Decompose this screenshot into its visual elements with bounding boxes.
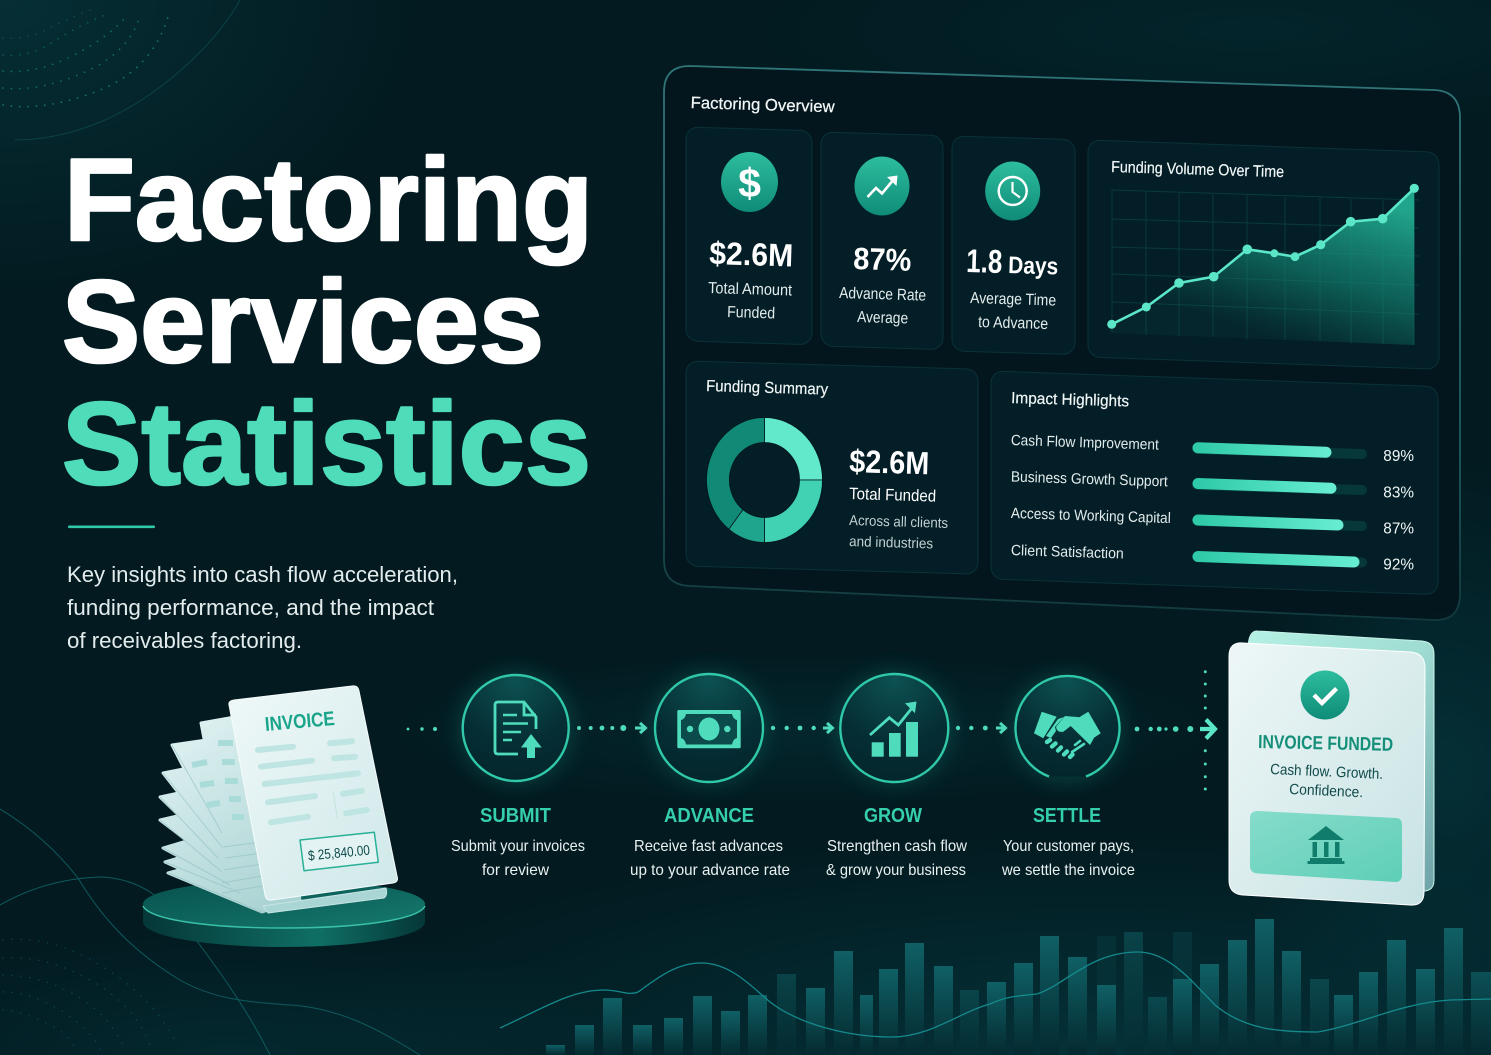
invoice amount box: $ 25,840.00 bbox=[307, 842, 371, 863]
donut chart bbox=[707, 418, 822, 542]
step: settle bbox=[1001, 672, 1135, 879]
subtitle: Key insights into cash flow acceleration, bbox=[67, 562, 458, 587]
progress row: business growth: 83% bbox=[1383, 484, 1414, 501]
subtitle bbox=[67, 562, 458, 653]
sheet line details bbox=[192, 743, 244, 817]
progress row: business growth bbox=[1011, 469, 1414, 501]
sheet edge shading bbox=[160, 745, 262, 912]
panel: funding summary: and industries bbox=[849, 534, 933, 552]
card: invoice funded: Confidence. bbox=[1289, 781, 1363, 801]
panel: funding summary: Total Funded bbox=[849, 485, 936, 506]
decorative dot field bottom left bbox=[3, 939, 175, 1052]
icon: check badge bbox=[1300, 670, 1350, 720]
invoice amount box bbox=[300, 832, 378, 871]
title: Statistics bbox=[62, 378, 591, 509]
arrow: advance to grow bbox=[823, 723, 832, 733]
decorative dot field top left bbox=[3, 10, 170, 107]
stat card: average time: Average Time bbox=[970, 290, 1056, 310]
step: advance: up to your advance rate bbox=[630, 862, 790, 879]
front invoice page bbox=[229, 686, 398, 900]
platform bbox=[143, 880, 425, 947]
step: grow: Strengthen cash flow bbox=[827, 838, 967, 855]
icon: handshake bbox=[1034, 712, 1101, 757]
progress row: business growth: Business Growth Support bbox=[1011, 469, 1169, 490]
panel: impact highlights: Impact Highlights bbox=[1011, 390, 1129, 410]
illustration: invoice stack on platform bbox=[143, 686, 425, 947]
progress row: cash flow: Cash Flow Improvement bbox=[1011, 432, 1160, 454]
stat card: advance rate: Advance Rate bbox=[839, 285, 926, 305]
panel: funding summary: Funding Summary bbox=[706, 378, 828, 399]
progress row: working capital: 87% bbox=[1383, 520, 1414, 537]
progress row: client satisfaction: 92% bbox=[1383, 556, 1414, 573]
title bbox=[62, 134, 593, 509]
icon: bank bbox=[1308, 826, 1344, 864]
step: grow bbox=[826, 670, 967, 879]
step: submit: SUBMIT bbox=[480, 805, 551, 827]
decorative arc top left bbox=[15, 0, 240, 140]
stat card: total amount funded: Funded bbox=[727, 304, 775, 322]
step: settle: Your customer pays, bbox=[1003, 838, 1134, 855]
title: Services bbox=[62, 256, 544, 387]
panel: funding summary bbox=[686, 361, 978, 574]
stat card: average time: to Advance bbox=[978, 314, 1048, 333]
step: advance bbox=[630, 670, 790, 879]
line chart: funding volume over time bbox=[1088, 140, 1439, 369]
stat card: advance rate bbox=[821, 132, 943, 350]
stat card: total amount funded: Total Amount bbox=[708, 280, 793, 300]
stat card: average time bbox=[952, 136, 1075, 355]
stat card: total amount funded: $2.6M bbox=[709, 235, 794, 273]
icon: banknote bbox=[677, 710, 741, 748]
bottom bar chart decoration bbox=[546, 919, 1491, 1055]
arrow: grow to settle bbox=[996, 723, 1006, 733]
icon: document upload bbox=[495, 702, 542, 758]
progress row: cash flow: 89% bbox=[1383, 448, 1414, 465]
stat card: average time: Days bbox=[1008, 252, 1059, 280]
progress row: cash flow bbox=[1011, 432, 1414, 465]
step: advance: Receive fast advances bbox=[634, 838, 783, 855]
step: advance: ADVANCE bbox=[664, 805, 754, 827]
subtitle: funding performance, and the impact bbox=[67, 595, 434, 620]
fanned invoice sheets bbox=[160, 708, 300, 912]
icon: rising bars bbox=[870, 702, 918, 757]
panel heading: Factoring Overview bbox=[690, 94, 835, 116]
progress row: working capital: Access to Working Capital bbox=[1011, 505, 1171, 527]
stat card: advance rate: 87% bbox=[853, 241, 912, 278]
bottom wave line bbox=[500, 952, 1491, 1037]
panel: funding summary: Across all clients bbox=[849, 513, 948, 532]
line chart: funding volume over time: Funding Volume Over Time bbox=[1111, 159, 1284, 181]
title divider bbox=[68, 526, 155, 528]
step: grow: & grow your business bbox=[826, 862, 966, 879]
step: settle: we settle the invoice bbox=[1001, 862, 1135, 879]
stat card: advance rate: Average bbox=[857, 309, 908, 328]
stat card: average time: 1.8 bbox=[966, 242, 1003, 280]
panel: impact highlights bbox=[991, 371, 1438, 595]
bank panel bbox=[1250, 811, 1402, 882]
card: invoice funded: INVOICE FUNDED bbox=[1258, 732, 1393, 756]
under sheet bbox=[263, 888, 387, 913]
step: settle: SETTLE bbox=[1033, 805, 1101, 827]
process connector dots bbox=[407, 670, 1207, 790]
panel: factoring overview dashboard bbox=[664, 66, 1460, 620]
progress row: client satisfaction bbox=[1011, 542, 1414, 573]
stat card: total amount funded: $ bbox=[738, 160, 761, 206]
progress row: client satisfaction: Client Satisfaction bbox=[1011, 542, 1124, 563]
arrow: settle to invoice funded bbox=[1200, 720, 1215, 738]
title: Factoring bbox=[64, 134, 593, 265]
subtitle: of receivables factoring. bbox=[67, 628, 302, 653]
step: submit: for review bbox=[482, 862, 549, 879]
step: submit bbox=[451, 670, 585, 879]
step: submit: Submit your invoices bbox=[451, 838, 585, 855]
panel: funding summary: $2.6M bbox=[849, 443, 930, 481]
front invoice page: INVOICE bbox=[264, 708, 336, 736]
arrow: submit to advance bbox=[635, 723, 646, 733]
card: invoice funded bbox=[1229, 631, 1434, 905]
stat card: total amount funded bbox=[686, 127, 812, 345]
decorative curves bottom left bbox=[0, 809, 420, 1055]
step: grow: GROW bbox=[864, 805, 922, 827]
card: invoice funded: Cash flow. Growth. bbox=[1270, 761, 1383, 783]
progress row: working capital bbox=[1011, 505, 1414, 537]
